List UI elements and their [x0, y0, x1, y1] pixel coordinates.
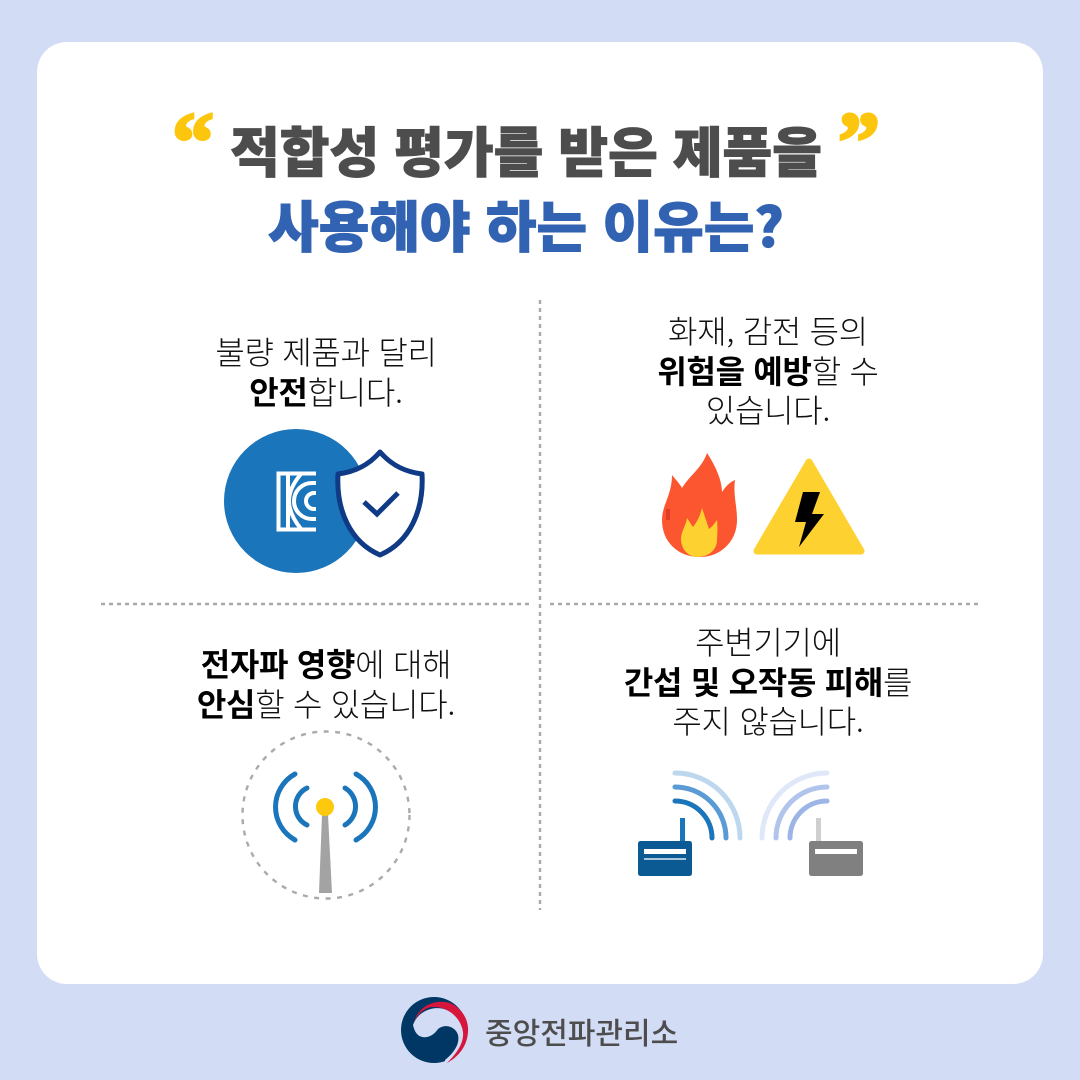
text: hazard prevention: [657, 307, 879, 432]
text: electromagnetic reassurance: 전자파 영향에 대해: [201, 640, 451, 686]
text: hazard prevention: 위험을 예방할 수: [657, 346, 879, 392]
text: no interference: 주변기기에: [695, 618, 841, 664]
text: electromagnetic reassurance: [197, 640, 455, 726]
logo text: organization name: 중앙전파관리소: [485, 1009, 678, 1053]
closing quote mark: ”: [838, 96, 880, 189]
text: safety: [215, 328, 437, 414]
text: safety: 불량 제품과 달리: [215, 328, 437, 374]
title line 2: 사용해야 하는 이유는?: [268, 183, 784, 263]
opening quote mark: “: [172, 96, 214, 189]
text: hazard prevention: 화재, 감전 등의: [668, 307, 868, 353]
text: hazard prevention: 있습니다.: [706, 386, 830, 432]
heading: title: [172, 96, 880, 263]
text: no interference: 간섭 및 오작동 피해를: [624, 658, 912, 704]
text: safety: 안전합니다.: [249, 368, 403, 414]
title line 1: 적합성 평가를 받은 제품을: [230, 109, 822, 188]
text: no interference: 주지 않습니다.: [672, 697, 864, 743]
text: electromagnetic reassurance: 안심할 수 있습니다.: [197, 680, 455, 726]
text: no interference: [624, 618, 912, 743]
